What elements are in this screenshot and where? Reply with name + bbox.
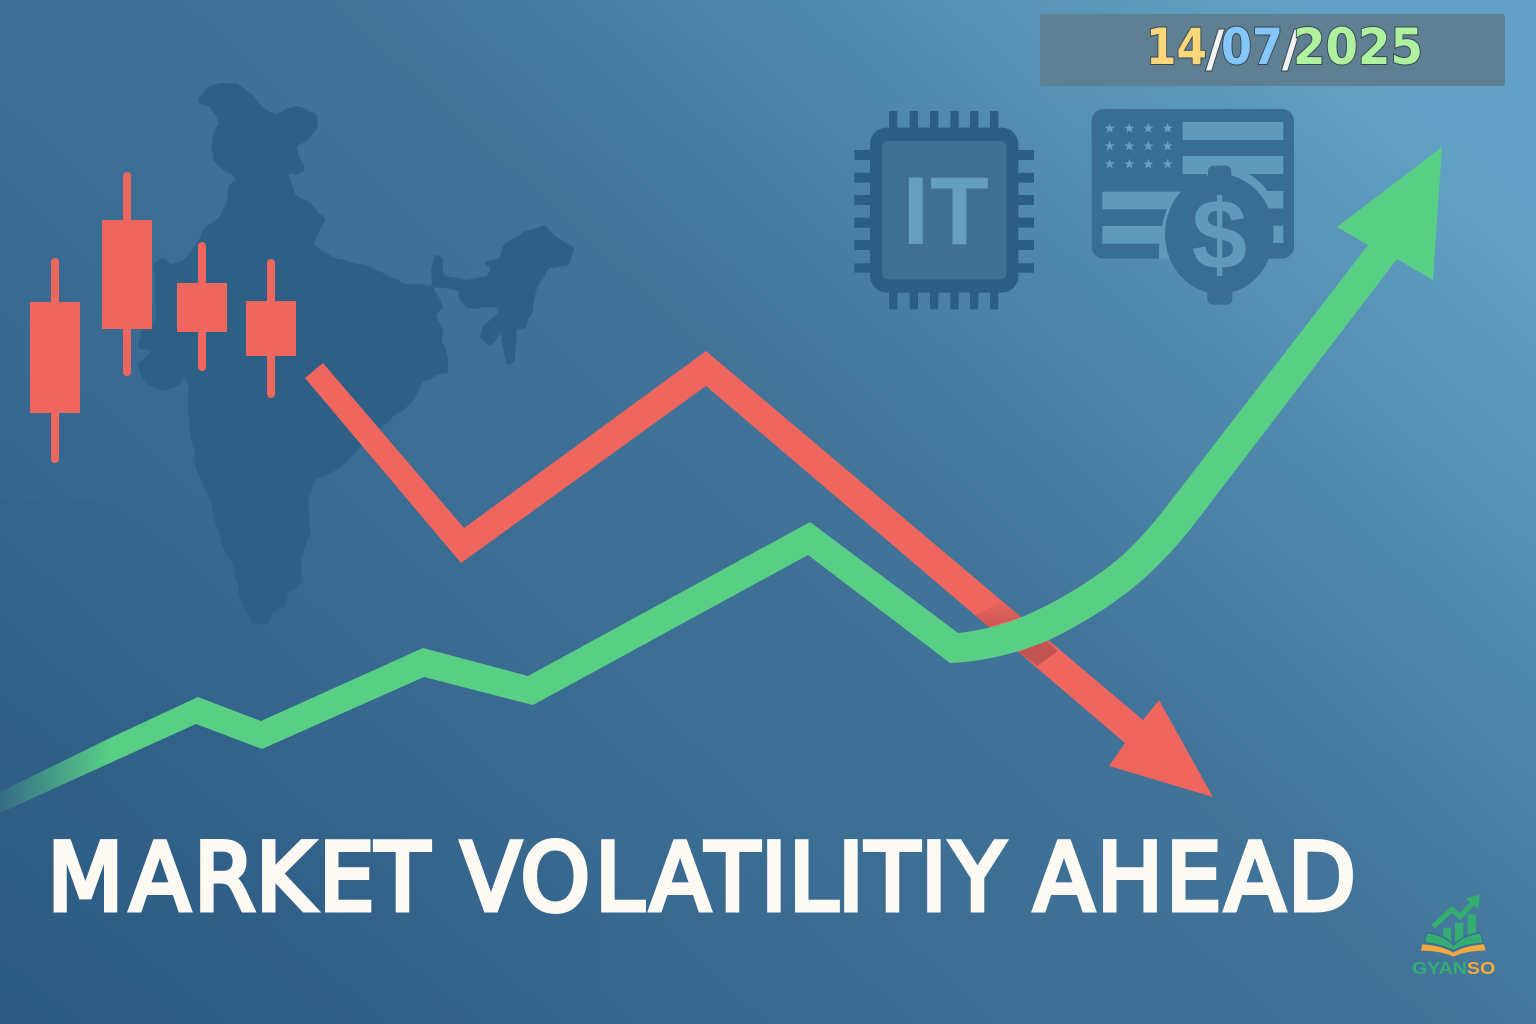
- date banner: 14: [1146, 18, 1207, 76]
- candlestick chart: [30, 172, 296, 463]
- icon: US flag with dollar coin: [1092, 109, 1294, 305]
- title: MARKET: [47, 822, 430, 933]
- title: VOLATILITIY: [461, 822, 1005, 933]
- green rising arrow: [0, 147, 1442, 813]
- date banner: [1040, 14, 1505, 86]
- title: AHEAD: [1034, 822, 1356, 933]
- map of India silhouette: [137, 83, 575, 625]
- logo book: [1421, 933, 1486, 957]
- dollar sign: $: [1192, 179, 1247, 290]
- date banner: 07: [1221, 18, 1283, 76]
- date banner: 2025: [1293, 18, 1423, 76]
- red line shading near crossing: [975, 601, 1022, 627]
- logo growth arrow: [1433, 894, 1480, 927]
- chip label: I: [902, 158, 929, 265]
- logo bars: [1443, 914, 1476, 943]
- red falling arrow: [305, 351, 1213, 797]
- date banner: /: [1206, 20, 1225, 78]
- logo: GYANSO: [1412, 894, 1495, 978]
- arrow crossing shadow: [1018, 641, 1058, 666]
- background corner shading: [0, 500, 600, 1024]
- date banner: /: [1282, 20, 1301, 78]
- icon: IT chip: [854, 111, 1034, 309]
- title: [47, 822, 1356, 933]
- logo wordmark: GYANSO: [1412, 958, 1495, 978]
- chip label: T: [930, 158, 989, 265]
